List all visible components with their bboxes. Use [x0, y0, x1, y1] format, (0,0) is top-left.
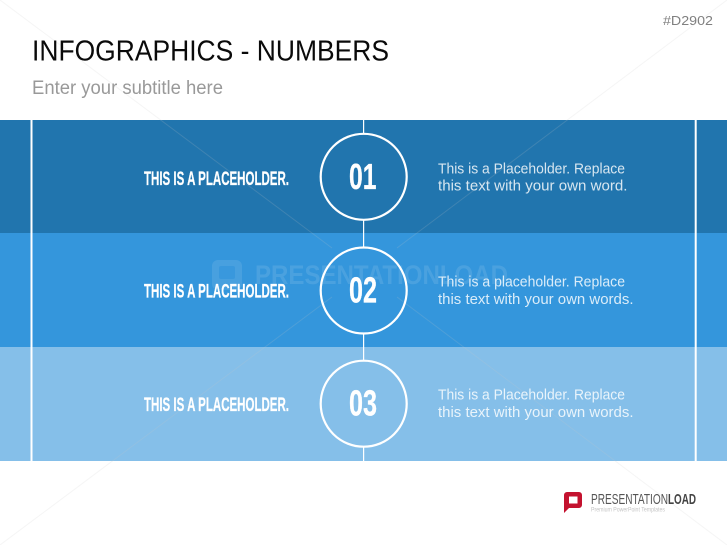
row 2 heading: THIS IS A PLACEHOLDER. [144, 280, 289, 302]
row 1 heading: THIS IS A PLACEHOLDER. [144, 168, 289, 190]
title: INFOGRAPHICS - NUMBERS [32, 36, 389, 68]
panel: row 2 [144, 248, 634, 334]
left vertical rule [30, 120, 32, 461]
logo: PresentationLoad [564, 491, 696, 514]
band 1 background [0, 120, 727, 233]
row 3 description: This is a Placeholder. Replace [438, 386, 625, 404]
product code: #D2902 [663, 13, 713, 28]
logo wordmark: PRESENTATION [591, 491, 668, 508]
row 2 number circle [321, 248, 407, 334]
right vertical rule [695, 120, 697, 461]
logo tagline: Premium PowerPoint Templates [591, 506, 666, 514]
row 1 description: This is a Placeholder. Replace [438, 160, 625, 178]
row 3 heading: THIS IS A PLACEHOLDER. [144, 394, 289, 416]
panel: row 3 [144, 361, 634, 447]
row 3 number: 03 [349, 382, 377, 424]
row 1 description: this text with your own word. [438, 178, 628, 194]
watermark: PRESENTATIONLOAD [255, 260, 508, 290]
row 2 description: This is a placeholder. Replace [438, 274, 625, 290]
icon: logo mark [564, 492, 582, 513]
band 3 background [0, 347, 727, 461]
band 2 background [0, 233, 727, 347]
row 1 number circle [321, 134, 407, 220]
row 1 number: 01 [349, 156, 376, 197]
center connector line [363, 120, 365, 461]
row 2 description: this text with your own words. [438, 291, 634, 308]
logo wordmark: LOAD [668, 491, 696, 508]
row 2 number: 02 [349, 270, 377, 310]
panel: row 1 [144, 134, 629, 220]
row 3 number circle [321, 361, 407, 447]
subtitle: Enter your subtitle here [32, 78, 223, 99]
row 3 description: this text with your own words. [438, 404, 634, 421]
